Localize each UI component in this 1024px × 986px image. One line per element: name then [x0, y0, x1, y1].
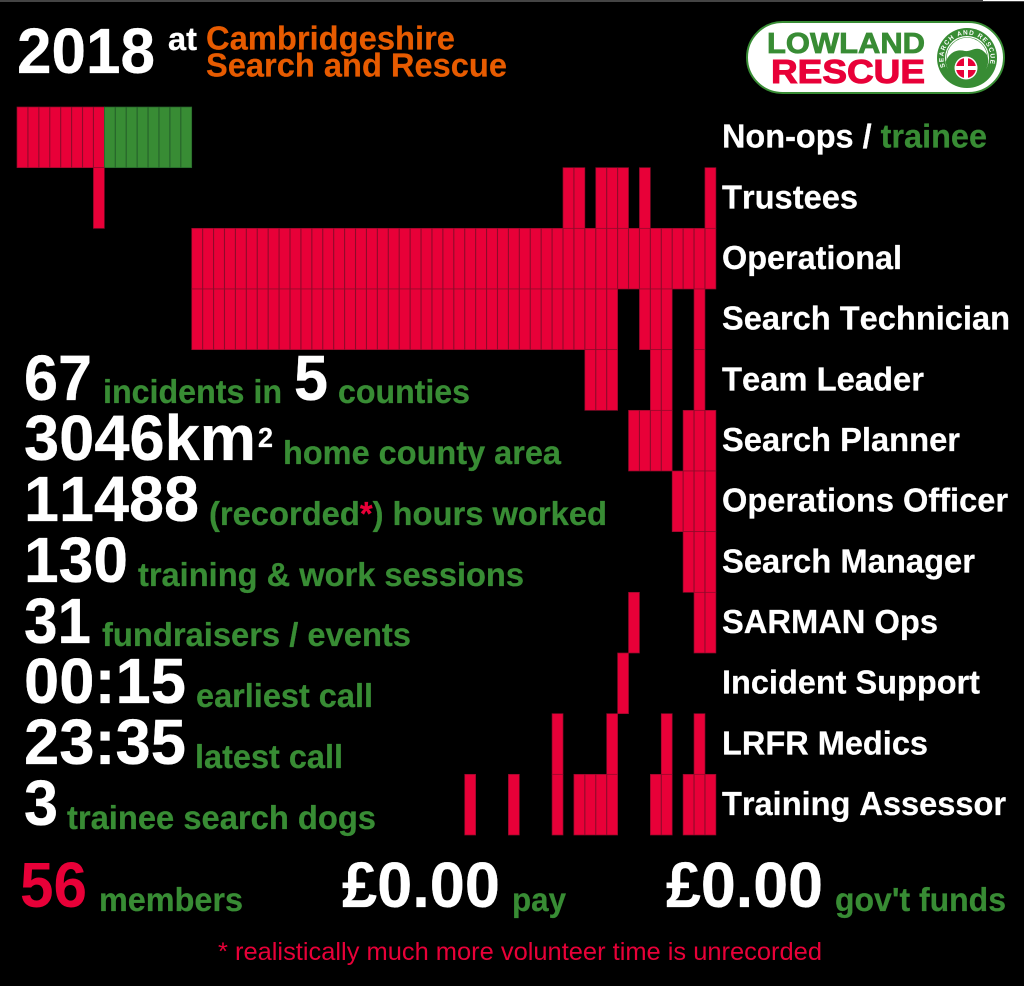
stat: government funds: [666, 849, 1006, 921]
chart row: Incident Support: [618, 653, 629, 714]
stat: home county area: [24, 402, 562, 474]
stat: incidents and counties: counties: [338, 373, 470, 410]
stat: incidents and counties: 5: [294, 342, 328, 414]
stat: incidents and counties: incidents in: [103, 373, 282, 410]
stat: earliest call: [24, 645, 373, 717]
stat: pay: pay: [512, 881, 567, 918]
logo: Lowland Rescue: LOWLAND: [767, 28, 925, 60]
role labels: Operations Officer: [722, 482, 1008, 519]
chart row: LRFR Medics: [552, 714, 705, 774]
stat: fundraisers: [24, 585, 411, 657]
stat: members: members: [99, 881, 243, 918]
footnote: * realistically much more volunteer time is unrecorded: [218, 938, 822, 966]
logo: Lowland Rescue: RESCUE: [771, 53, 925, 90]
stat: home county area: 2: [258, 422, 273, 453]
role labels: [722, 118, 1010, 822]
role labels: Incident Support: [722, 664, 980, 701]
stat: pay: £0.00: [342, 849, 500, 921]
stat: trainee search dogs: [24, 767, 376, 839]
stat: training sessions: training & work sessions: [138, 556, 524, 593]
chart row: Training Assessor: [465, 774, 716, 835]
chart row: Search Technician: [192, 289, 705, 350]
chart row: SARMAN Ops: [629, 592, 716, 653]
title: [17, 15, 507, 87]
role labels: Operational: [722, 239, 902, 276]
role labels: Search Technician: [722, 300, 1010, 337]
chart row: Team Leader: [585, 350, 705, 410]
stat: hours worked: [24, 463, 607, 535]
chart row: Non-ops / trainee: [17, 107, 192, 168]
role labels: Training Assessor: [722, 785, 1006, 822]
stat: earliest call: 00:15: [24, 645, 186, 717]
title: Search and Rescue: [206, 46, 507, 84]
stat: home county area: home county area: [283, 434, 562, 471]
title: 2018: [17, 15, 155, 87]
chart row: Trustees: [93, 168, 716, 228]
role labels: Search Planner: [722, 421, 960, 458]
stat: earliest call: earliest call: [196, 677, 373, 714]
chart row: Operational: [192, 228, 716, 289]
stat: incidents and counties: [24, 342, 470, 414]
stat: trainee search dogs: trainee search dogs: [67, 799, 376, 836]
stat: hours worked: 11488: [24, 463, 199, 535]
stat: government funds: £0.00: [666, 849, 823, 921]
stat: trainee search dogs: 3: [24, 767, 58, 839]
role labels: Trustees: [722, 178, 858, 215]
role labels: Team Leader: [722, 360, 924, 397]
role labels: Non-ops / trainee: [722, 118, 987, 155]
stat: members: 56: [20, 849, 87, 921]
chart row: Search Planner: [629, 410, 716, 471]
stat: home county area: 3046km: [24, 402, 256, 474]
logo: Lowland Rescue: SEARCH AND RESCUE: [938, 30, 995, 68]
stat: fundraisers: fundraisers / events: [102, 616, 411, 653]
title: at: [168, 21, 197, 57]
role labels: Search Manager: [722, 542, 975, 579]
role labels: LRFR Medics: [722, 724, 928, 761]
title: Cambridgeshire: [206, 20, 455, 56]
logo: Lowland Rescue: [746, 21, 1005, 94]
stat: hours worked: (recorded*) hours worked: [209, 495, 607, 532]
role labels: SARMAN Ops: [722, 603, 938, 640]
chart row: Operations Officer: [672, 471, 716, 532]
stat: latest call: latest call: [195, 738, 343, 775]
stat: members: [20, 849, 243, 921]
stat: latest call: [24, 706, 343, 778]
stat: training sessions: 130: [24, 524, 128, 596]
stat: training sessions: [24, 524, 524, 596]
stat: fundraisers: 31: [24, 585, 91, 657]
stat: latest call: 23:35: [24, 706, 186, 778]
stat: incidents and counties: 67: [24, 342, 92, 414]
chart row: Search Manager: [683, 532, 716, 592]
stat: government funds: gov't funds: [835, 881, 1006, 918]
